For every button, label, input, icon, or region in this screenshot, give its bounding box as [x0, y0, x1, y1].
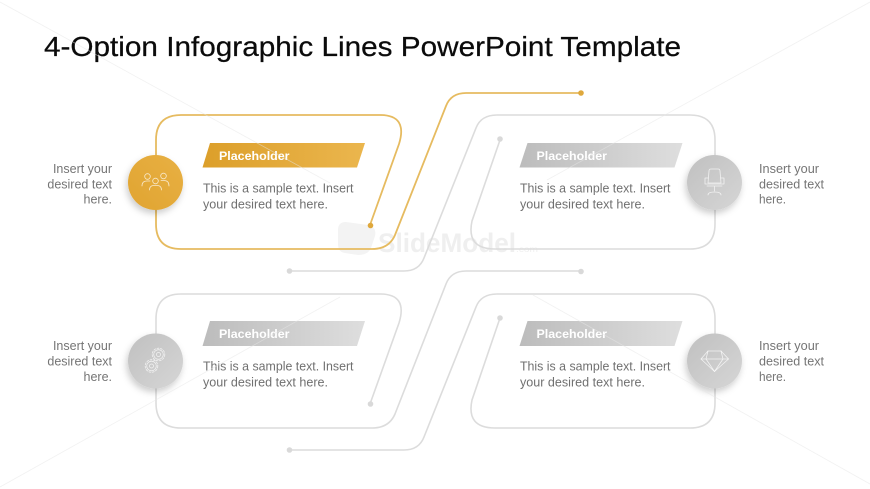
placeholder banner — [202, 143, 365, 168]
side text: desired text — [759, 178, 825, 192]
body text: your desired text here. — [203, 376, 328, 390]
side text: Insert your — [53, 162, 112, 176]
panel: option 3 (gears, bottom left) — [47, 269, 584, 428]
icon circle — [687, 334, 742, 388]
line end dots — [287, 136, 503, 274]
panel: option 2 (chair, top right) — [287, 115, 825, 274]
watermark: SlideModel — [378, 228, 516, 258]
side text: desired text — [759, 354, 825, 368]
side text: here. — [84, 370, 112, 384]
body text: This is a sample text. Insert — [520, 182, 671, 196]
placeholder banner — [520, 143, 682, 168]
side text: here. — [84, 192, 112, 206]
body text: This is a sample text. Insert — [203, 182, 354, 196]
line end dots — [368, 269, 584, 407]
side text: Insert your — [759, 339, 819, 353]
panel: option 4 (diamond, bottom right) — [287, 294, 825, 453]
line end dots — [287, 315, 503, 453]
icon circle — [128, 334, 183, 388]
outline and connector line — [156, 93, 581, 249]
banner label: Placeholder — [219, 149, 290, 163]
icon: people — [142, 173, 169, 190]
watermark — [338, 222, 538, 258]
banner label: Placeholder — [536, 149, 607, 163]
icon: diamond — [701, 351, 728, 372]
body text: This is a sample text. Insert — [520, 360, 671, 374]
side text: desired text — [47, 178, 113, 192]
body text: your desired text here. — [203, 198, 328, 212]
body text: your desired text here. — [520, 376, 645, 390]
side text: here. — [759, 370, 786, 384]
side text: here. — [759, 192, 786, 206]
body text: This is a sample text. Insert — [203, 360, 354, 374]
icon: office chair — [705, 169, 724, 195]
placeholder banner — [520, 321, 682, 346]
banner label: Placeholder — [536, 327, 607, 341]
icon circle — [687, 155, 742, 210]
side text: Insert your — [53, 339, 112, 353]
side text: desired text — [47, 354, 113, 368]
watermark: .com — [516, 245, 538, 254]
side text: Insert your — [759, 162, 819, 176]
placeholder banner — [202, 321, 365, 346]
banner label: Placeholder — [219, 327, 290, 341]
panel: option 1 (people, highlighted) — [47, 90, 584, 249]
outline and connector line — [290, 294, 715, 450]
title: 4-Option Infographic Lines PowerPoint Template — [44, 31, 681, 62]
outline and connector line — [290, 115, 715, 271]
outline and connector line — [156, 271, 581, 428]
icon: gears — [145, 348, 165, 372]
icon circle — [128, 155, 183, 210]
body text: your desired text here. — [520, 198, 645, 212]
line end dots — [368, 90, 584, 228]
